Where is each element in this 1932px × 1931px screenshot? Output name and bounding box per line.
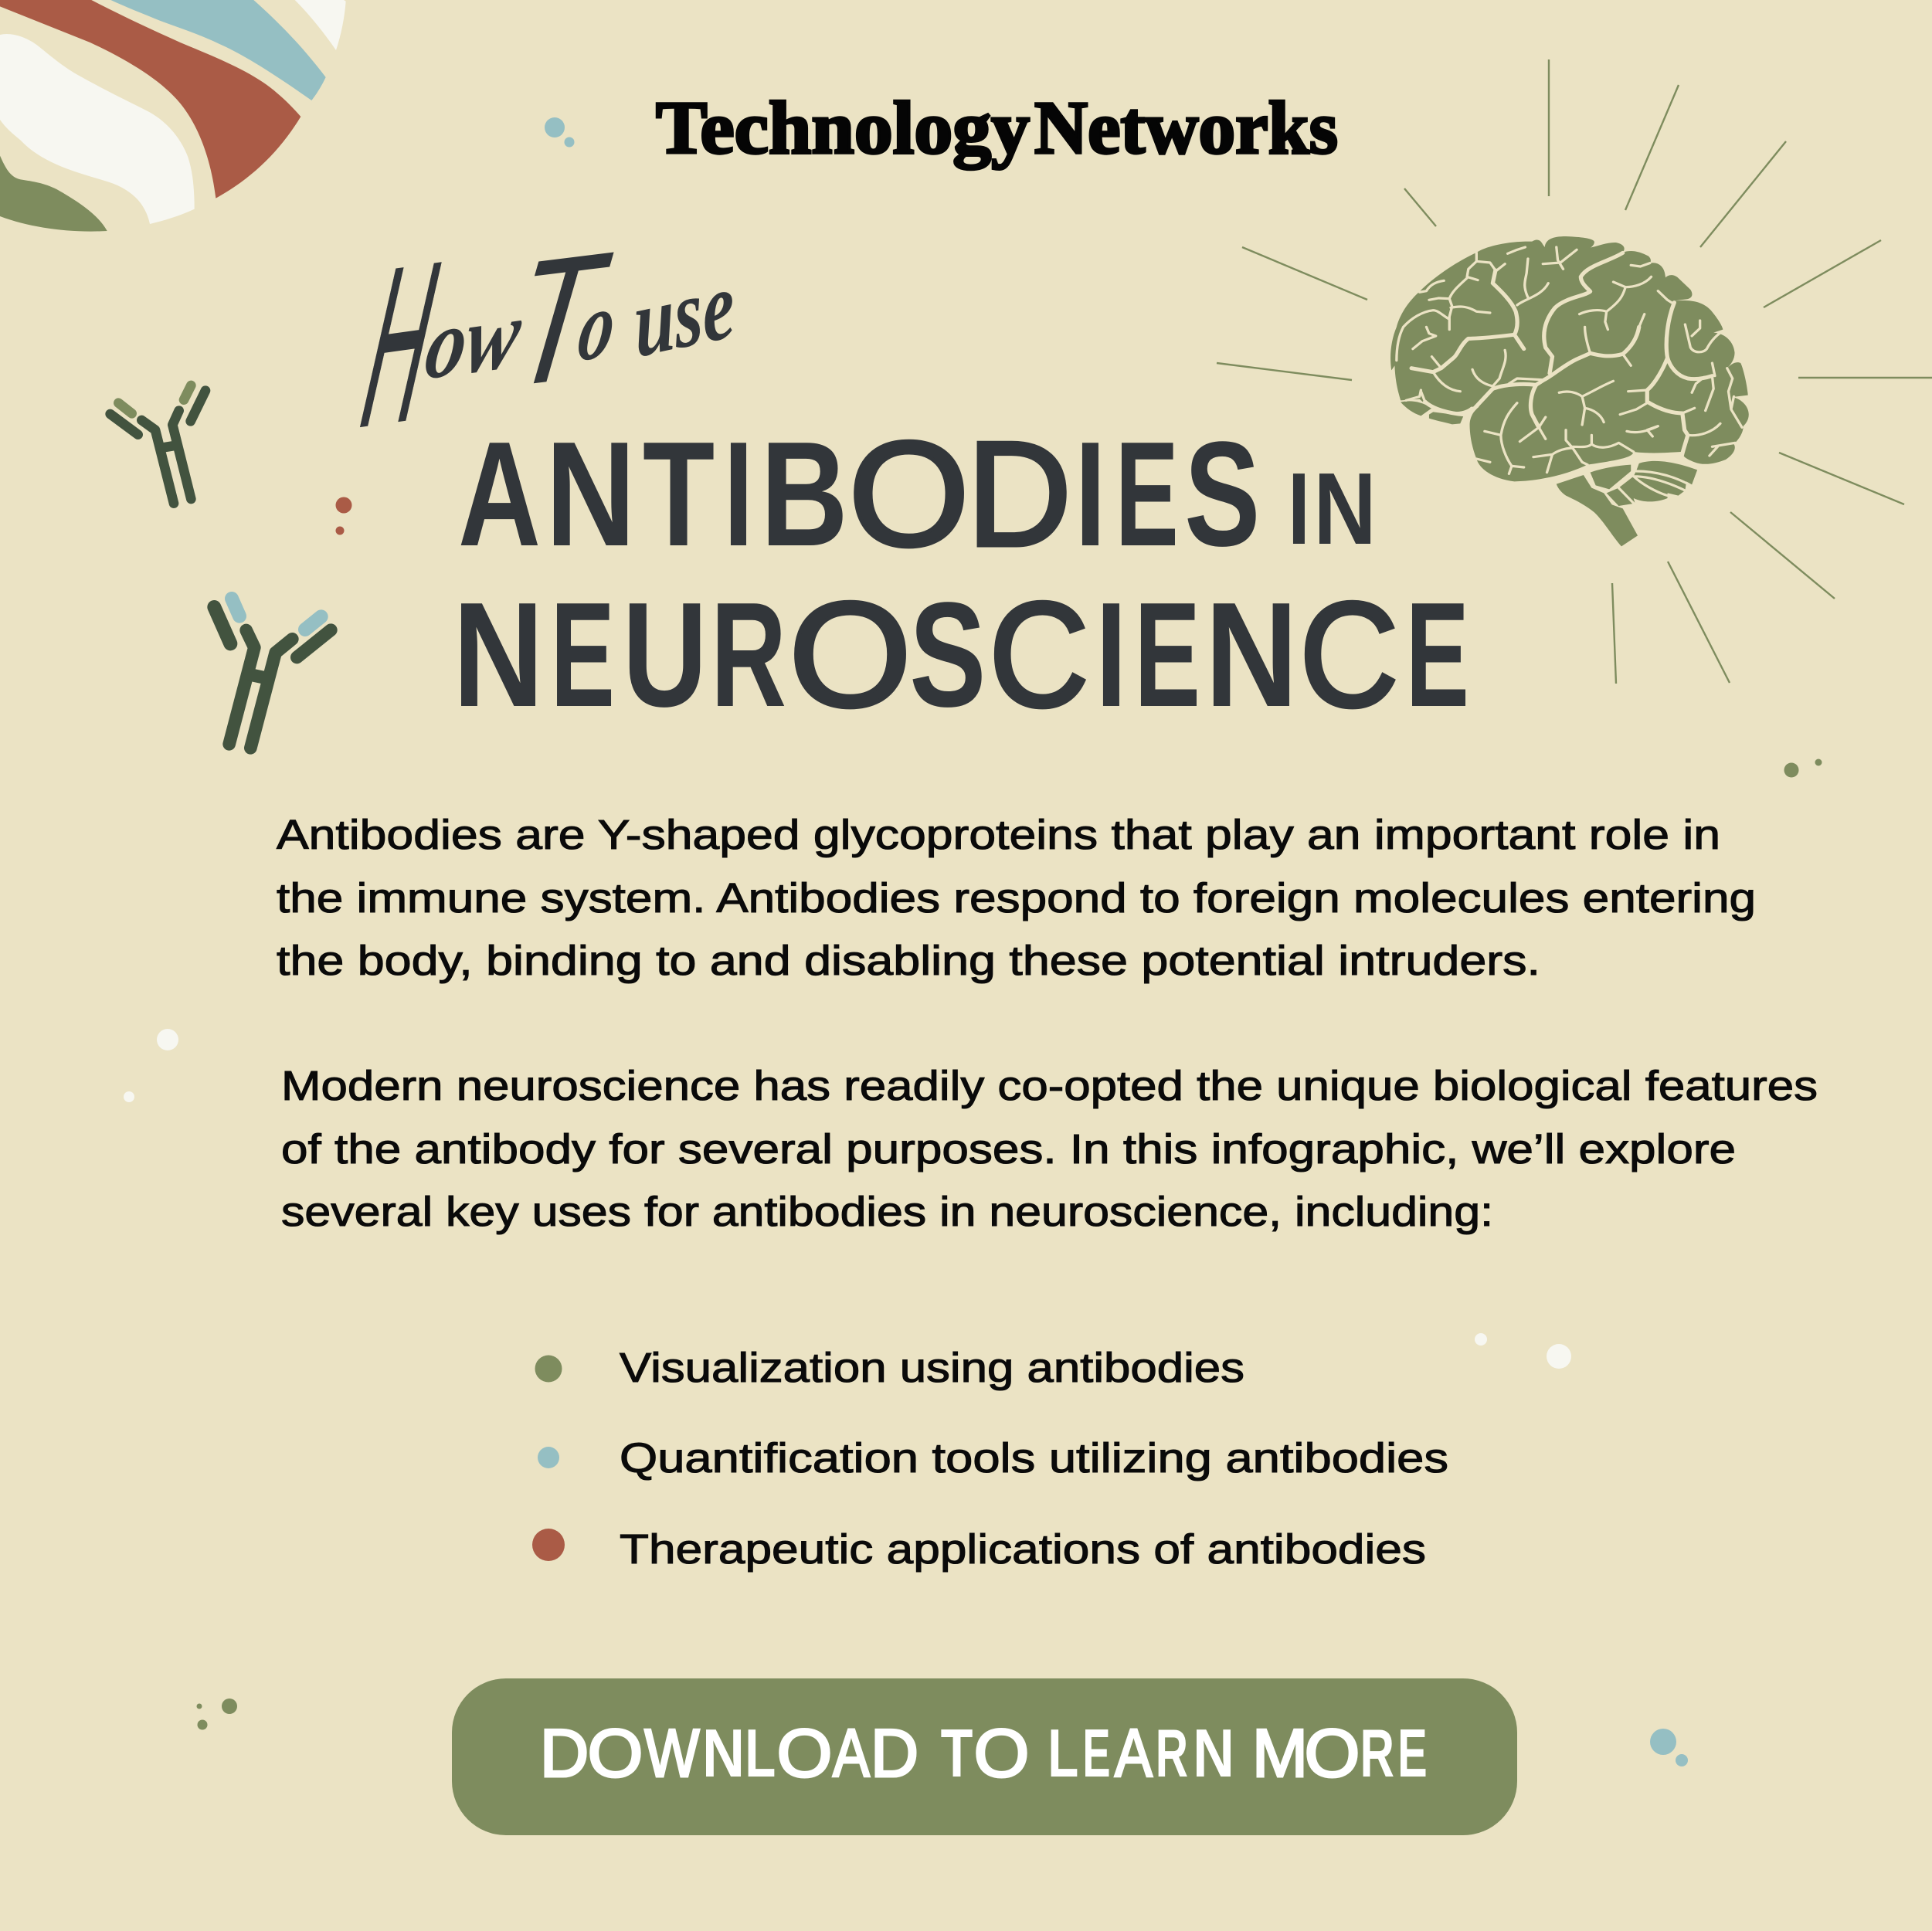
decorative wave circle: top-left corner xyxy=(0,0,346,232)
title: Antibodies in Neuroscience: E xyxy=(551,571,615,738)
intro paragraph 1: the body, binding to and disabling these potential intruders. xyxy=(277,938,1540,984)
title: Antibodies in Neuroscience: I xyxy=(1095,571,1127,738)
button: download to learn more: M xyxy=(1252,1715,1308,1791)
title: Antibodies in Neuroscience: S xyxy=(909,571,986,738)
bullet: therapeutic: Therapeutic applications of antibodies xyxy=(620,1526,1426,1573)
decorative dots: red xyxy=(335,497,352,535)
title: Antibodies in Neuroscience: I xyxy=(1075,410,1106,577)
decorative dots: white right xyxy=(1475,1333,1571,1369)
button: download to learn more: T xyxy=(941,1715,973,1791)
intro paragraph 1 xyxy=(277,812,1756,984)
icon: large antibody xyxy=(214,599,331,748)
button: download to learn more: N xyxy=(702,1715,745,1791)
title: Antibodies in Neuroscience: O xyxy=(789,571,912,738)
button: download to learn more: A xyxy=(1115,1715,1153,1791)
icon: small antibody xyxy=(110,385,205,504)
title: Antibodies in Neuroscience: T xyxy=(643,410,715,577)
title: Antibodies in Neuroscience: N xyxy=(545,410,636,577)
intro paragraph 1: Antibodies are Y-shaped glycoproteins that play an important role in xyxy=(277,812,1720,858)
button: download to learn more: A xyxy=(833,1715,870,1791)
sun rays around brain xyxy=(1217,59,1932,684)
script heading: How to use: H xyxy=(350,213,450,476)
title: Antibodies in Neuroscience: R xyxy=(711,571,786,738)
title: Antibodies in Neuroscience: S xyxy=(1184,410,1260,577)
script heading: How to use: o xyxy=(572,268,623,382)
button: download to learn more: N xyxy=(1193,1715,1234,1791)
icon: brain xyxy=(1390,236,1749,546)
title: Antibodies in Neuroscience: E xyxy=(1115,410,1179,577)
script heading: How to use xyxy=(350,200,738,476)
button: download to learn more: L xyxy=(745,1715,776,1791)
bullet: quantification: Quantification tools utilizing antibodies xyxy=(620,1435,1448,1481)
title: Antibodies in Neuroscience: U xyxy=(623,571,708,738)
title: Antibodies in Neuroscience: A xyxy=(458,410,541,577)
button: download to learn more: E xyxy=(1082,1715,1111,1791)
button: download to learn more: L xyxy=(1047,1715,1078,1791)
button: download to learn more: E xyxy=(1397,1715,1428,1791)
intro paragraph 2: several key uses for antibodies in neuroscience, including: xyxy=(281,1189,1493,1235)
title: Antibodies in Neuroscience xyxy=(453,410,1469,738)
button: download to learn more: O xyxy=(777,1715,833,1791)
decorative dots: green right xyxy=(1784,758,1822,777)
script heading: How to use: ow xyxy=(419,277,529,401)
bullet list xyxy=(532,1345,1448,1573)
title: Antibodies in Neuroscience: N xyxy=(453,571,544,738)
button: download to learn more: R xyxy=(1156,1715,1188,1791)
title: Antibodies in Neuroscience: N xyxy=(1205,571,1298,738)
logo: Technology Networks xyxy=(656,87,1338,169)
intro paragraph 2 xyxy=(281,1063,1818,1235)
logo: Technology Networks: Networks xyxy=(1034,87,1338,169)
button: download to learn more: D xyxy=(871,1715,918,1791)
decorative dots: blue bottom right xyxy=(1650,1729,1688,1766)
button: download to learn more: O xyxy=(1304,1715,1360,1791)
script heading: How to use: use xyxy=(630,249,738,378)
logo dots xyxy=(545,117,575,147)
button: download to learn more: W xyxy=(644,1715,700,1791)
button: download to learn more: O xyxy=(587,1715,643,1791)
title: Antibodies in Neuroscience: E xyxy=(1134,571,1200,738)
bullet: visualization: Visualization using antibodies xyxy=(620,1345,1244,1391)
intro paragraph 2: of the antibody for several purposes. In this infographic, we’ll explore xyxy=(281,1126,1736,1173)
title: Antibodies in Neuroscience: N xyxy=(1313,452,1377,565)
title: Antibodies in Neuroscience: I xyxy=(1288,452,1310,565)
title: Antibodies in Neuroscience: C xyxy=(1299,571,1399,738)
button: download to learn more: D xyxy=(540,1715,589,1791)
intro paragraph 2: Modern neuroscience has readily co-opted the unique biological features xyxy=(281,1063,1818,1109)
decorative dots: green bottom left xyxy=(196,1699,237,1730)
title: Antibodies in Neuroscience: D xyxy=(967,410,1071,577)
decorative dots: white left xyxy=(124,1029,178,1102)
button: download to learn more xyxy=(452,1678,1517,1835)
button: download to learn more: O xyxy=(973,1715,1029,1791)
intro paragraph 1: the immune system. Antibodies respond to foreign molecules entering xyxy=(277,875,1756,921)
script heading: How to use: T xyxy=(501,213,620,424)
button: download to learn more: R xyxy=(1360,1715,1394,1791)
title: Antibodies in Neuroscience: C xyxy=(989,571,1089,738)
title: Antibodies in Neuroscience: B xyxy=(760,410,848,577)
title: Antibodies in Neuroscience: E xyxy=(1406,571,1469,738)
logo: Technology Networks: Technology xyxy=(656,87,1030,169)
title: Antibodies in Neuroscience: O xyxy=(848,410,969,577)
title: Antibodies in Neuroscience: I xyxy=(724,410,753,577)
